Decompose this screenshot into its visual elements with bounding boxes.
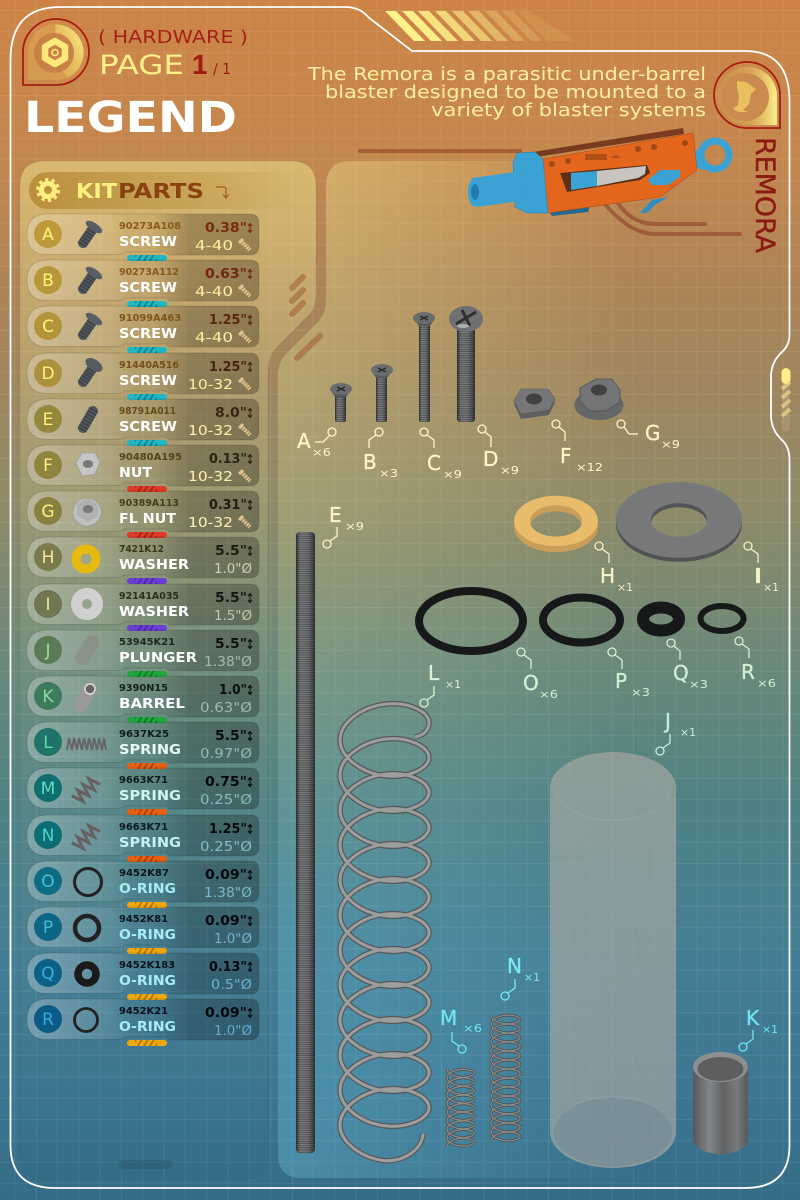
row B: 4-40 <box>195 285 233 300</box>
row A: 0.38" <box>205 221 247 236</box>
label G <box>617 420 680 451</box>
illustration: remora blaster <box>468 128 729 216</box>
label R: R <box>741 660 755 684</box>
heading: page number: 1 <box>192 49 208 80</box>
label G: ×9 <box>661 438 680 451</box>
label A <box>297 428 336 459</box>
label Q: ×3 <box>689 678 708 691</box>
label I: ×1 <box>763 581 779 594</box>
part H <box>522 501 590 547</box>
row N <box>27 815 259 862</box>
label L: ×1 <box>445 678 461 691</box>
heading: remora vertical: REMORA <box>749 137 780 254</box>
sub: holes <box>549 140 688 167</box>
title: LEGEND <box>24 93 237 143</box>
row J <box>27 630 259 677</box>
row H: 7421K12 <box>119 544 164 555</box>
row B: B <box>42 271 54 291</box>
row N: N <box>42 826 54 846</box>
panel: kit parts header <box>29 172 304 209</box>
row F: 90480A195 <box>119 452 182 463</box>
part A <box>330 383 352 422</box>
part F <box>514 389 555 419</box>
label I: I <box>753 564 763 588</box>
label K <box>739 1006 778 1051</box>
label N: N <box>507 954 522 978</box>
row Q: 0.13" <box>209 960 247 975</box>
row G: 0.31" <box>209 498 247 513</box>
row F: 10-32 <box>188 470 233 485</box>
row E: 98791A011 <box>119 406 176 417</box>
label J: J <box>663 709 671 733</box>
row B: SCREW <box>119 280 177 296</box>
row G: 90389A113 <box>119 498 179 509</box>
decorative top stripes <box>385 11 574 41</box>
row I: 1.5"Ø <box>214 609 252 624</box>
row P <box>27 907 259 954</box>
row A <box>27 214 259 261</box>
row B: 0.63" <box>205 267 247 282</box>
part P <box>543 598 620 642</box>
row G <box>27 491 259 538</box>
row A: 90273A108 <box>119 221 181 232</box>
part M spring <box>447 1069 474 1146</box>
part K barrel <box>693 1052 748 1154</box>
label P: ×3 <box>631 686 650 699</box>
label K: K <box>746 1006 760 1030</box>
row A: 4-40 <box>195 239 233 254</box>
row E: 8.0" <box>215 406 247 421</box>
row K: 1.0" <box>219 683 247 698</box>
part O <box>419 591 523 651</box>
text block: description <box>307 64 706 121</box>
row R: 1.0"Ø <box>214 1024 252 1039</box>
row N: 0.25"Ø <box>200 840 252 855</box>
row R <box>27 999 259 1046</box>
label H: H <box>600 564 615 588</box>
row F: F <box>43 456 53 476</box>
row Q: O-RING <box>119 973 176 989</box>
row J: J <box>44 641 51 661</box>
row Q: 0.5"Ø <box>211 978 252 993</box>
label N <box>501 954 540 1000</box>
row L: 0.97"Ø <box>200 747 252 762</box>
row K: 9390N15 <box>119 683 168 694</box>
part L spring <box>340 704 429 1161</box>
row L: SPRING <box>119 742 181 758</box>
part I <box>634 493 724 551</box>
label E: ×9 <box>345 520 364 533</box>
row H: H <box>42 548 54 568</box>
row I <box>27 584 259 631</box>
text block: description: blaster designed to be mounted to a <box>325 82 706 103</box>
row R: O-RING <box>119 1019 176 1035</box>
label P <box>608 648 650 699</box>
label H <box>595 542 633 594</box>
label O <box>517 648 558 701</box>
part N spring <box>491 1015 520 1141</box>
row D: SCREW <box>119 373 177 389</box>
row R: 0.09" <box>205 1006 247 1021</box>
label P: P <box>615 669 627 693</box>
label B <box>363 428 398 480</box>
label A: ×6 <box>312 446 331 459</box>
decorative gun lines <box>360 151 740 234</box>
row L: L <box>43 733 53 753</box>
row J: PLUNGER <box>119 650 198 666</box>
label O: ×6 <box>539 688 558 701</box>
label Q: Q <box>673 661 689 685</box>
decorative panel tab <box>119 1160 173 1169</box>
label N: ×1 <box>524 971 540 984</box>
row C: 1.25" <box>209 313 247 328</box>
label L: L <box>428 661 440 685</box>
row G: G <box>41 502 55 522</box>
label F: ×12 <box>576 461 603 474</box>
row I: 5.5" <box>215 591 247 606</box>
sub: orange body <box>543 133 697 213</box>
row C: C <box>42 317 54 337</box>
label E <box>323 503 364 548</box>
row A: SCREW <box>119 234 177 250</box>
sub: grip <box>640 197 668 213</box>
row E: SCREW <box>119 419 177 435</box>
row P: 9452K81 <box>119 914 168 925</box>
part R <box>700 606 744 631</box>
row K: 0.63"Ø <box>200 701 252 716</box>
part G <box>574 379 624 420</box>
row C: SCREW <box>119 326 177 342</box>
row Q: Q <box>41 964 55 984</box>
icon: arrow <box>216 187 229 198</box>
row H: WASHER <box>119 557 190 573</box>
sub: barrel <box>468 171 527 207</box>
label C: C <box>427 451 441 475</box>
row L <box>27 722 259 769</box>
sub: foot <box>550 206 590 216</box>
label C <box>420 428 462 481</box>
sub: ring <box>695 141 729 170</box>
row K <box>27 676 259 723</box>
label M <box>440 1006 482 1053</box>
row R: 9452K21 <box>119 1006 168 1017</box>
row J: 5.5" <box>215 637 247 652</box>
row P: 0.09" <box>205 914 247 929</box>
row Q <box>27 953 259 1000</box>
row H: 5.5" <box>215 544 247 559</box>
label M: ×6 <box>463 1022 482 1035</box>
label D: D <box>483 447 498 471</box>
label H: ×1 <box>617 581 633 594</box>
decorative channel dashes <box>292 277 320 358</box>
heading: kit parts <box>76 179 204 203</box>
heading: kit parts: KIT <box>76 179 117 203</box>
heading: page number <box>99 49 231 81</box>
row D <box>27 353 259 400</box>
row L: 9637K25 <box>119 729 169 740</box>
row J: 53945K21 <box>119 637 175 648</box>
icon: hardware logo <box>23 19 89 85</box>
row F: NUT <box>119 465 153 481</box>
label E: E <box>329 503 342 527</box>
heading: page number: / 1 <box>213 60 231 78</box>
row I: I <box>45 595 51 615</box>
row R: R <box>42 1010 54 1030</box>
row H: 1.0"Ø <box>214 562 252 577</box>
row E: 10-32 <box>188 424 233 439</box>
row O: O <box>41 872 55 892</box>
row N: 9663K71 <box>119 822 168 833</box>
label J <box>656 709 696 755</box>
label B: B <box>363 450 377 474</box>
row C <box>27 306 259 353</box>
panel: exploded parts backdrop <box>278 161 568 1178</box>
part Q <box>643 608 679 630</box>
row D: 10-32 <box>188 378 233 393</box>
label F <box>552 420 603 474</box>
heading: page number: PAGE <box>99 50 184 81</box>
row O: 9452K87 <box>119 868 169 879</box>
row H <box>27 537 259 584</box>
row B <box>27 260 259 307</box>
row B: 90273A112 <box>119 267 179 278</box>
row G: FL NUT <box>119 511 177 527</box>
label R: ×6 <box>757 677 776 690</box>
label M: M <box>440 1006 457 1030</box>
text block: description: variety of blaster systems <box>431 100 706 121</box>
row M: M <box>41 779 55 799</box>
row M <box>27 768 259 815</box>
row D: D <box>41 364 55 384</box>
row I: 92141A035 <box>119 591 179 602</box>
row M: SPRING <box>119 788 181 804</box>
row M: 0.25"Ø <box>200 793 252 808</box>
row O: 1.38"Ø <box>204 886 252 901</box>
row G: 10-32 <box>188 516 233 531</box>
label A: A <box>297 429 311 453</box>
row C: 91099A463 <box>119 313 181 324</box>
sub: window <box>560 165 650 192</box>
sub: slider <box>648 170 680 185</box>
label B: ×3 <box>379 467 398 480</box>
row C: 4-40 <box>195 331 233 346</box>
label D <box>478 425 519 477</box>
row E <box>27 399 259 446</box>
row M: 0.75" <box>205 775 247 790</box>
row F <box>27 445 259 492</box>
row Q: 9452K183 <box>119 960 175 971</box>
row P: 1.0"Ø <box>214 932 252 947</box>
label F: F <box>560 444 572 468</box>
row O: O-RING <box>119 881 176 897</box>
icon: remora logo <box>714 62 780 128</box>
row K: K <box>42 687 54 707</box>
row D: 91440A516 <box>119 360 179 371</box>
heading: kit parts: PARTS <box>118 179 204 203</box>
row L: 5.5" <box>215 729 247 744</box>
row K: BARREL <box>119 696 185 712</box>
label C: ×9 <box>443 468 462 481</box>
label L <box>420 661 461 707</box>
row F: 0.13" <box>209 452 247 467</box>
label D: ×9 <box>500 464 519 477</box>
sub: blue block <box>513 152 548 213</box>
part B <box>371 364 393 422</box>
label Q <box>667 639 708 691</box>
part J tube <box>550 752 676 1168</box>
label O: O <box>523 671 539 695</box>
row E: E <box>43 410 53 430</box>
row N: 1.25" <box>209 822 247 837</box>
label G: G <box>645 421 660 445</box>
part E <box>296 532 315 1153</box>
decorative side gauge <box>782 368 790 432</box>
part D <box>449 306 483 422</box>
row O: 0.09" <box>205 868 247 883</box>
row P: P <box>43 918 53 938</box>
row M: 9663K71 <box>119 775 168 786</box>
part C <box>413 312 435 422</box>
row D: 1.25" <box>209 360 247 375</box>
icon: gear <box>38 180 58 200</box>
label J: ×1 <box>680 726 696 739</box>
label R <box>735 637 776 690</box>
panel: kit parts backdrop <box>20 161 316 1179</box>
row I: WASHER <box>119 604 190 620</box>
row A: A <box>42 225 54 245</box>
text block: description: The Remora is a parasitic under-barrel <box>307 64 706 85</box>
label I <box>744 542 779 594</box>
heading: hardware: ( HARDWARE ) <box>98 27 248 48</box>
row J: 1.38"Ø <box>204 655 252 670</box>
label K: ×1 <box>762 1023 778 1036</box>
row P: O-RING <box>119 927 176 943</box>
row N: SPRING <box>119 835 181 851</box>
sub: top rail <box>533 128 684 157</box>
row O <box>27 861 259 908</box>
